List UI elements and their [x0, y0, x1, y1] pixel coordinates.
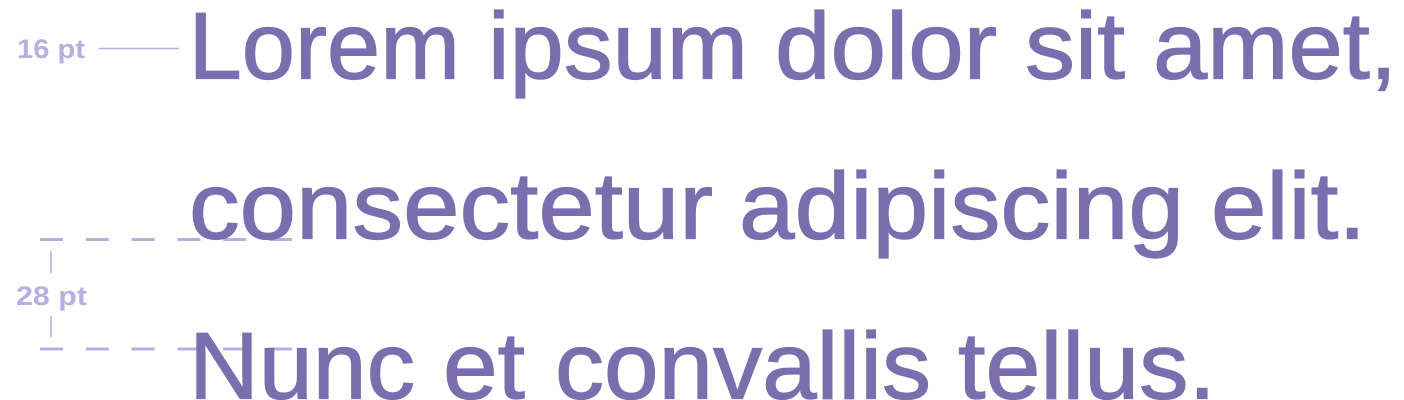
line spacing label: 28 pt: [16, 281, 87, 311]
text line 2: adipiscing: [739, 154, 1184, 260]
text line 2: elit.: [1211, 154, 1366, 260]
font size label: 16 pt: [17, 34, 85, 64]
bottom dashed guide: [40, 348, 292, 350]
font size leader line: [99, 48, 179, 50]
line spacing upper tick: [50, 251, 52, 273]
text line 3: [189, 314, 1216, 400]
text line 2: [189, 154, 1366, 260]
top dashed guide: [40, 238, 292, 241]
line spacing lower tick: [50, 316, 52, 337]
text line 1: [188, 0, 1397, 100]
text line 2: consectetur: [189, 154, 713, 260]
